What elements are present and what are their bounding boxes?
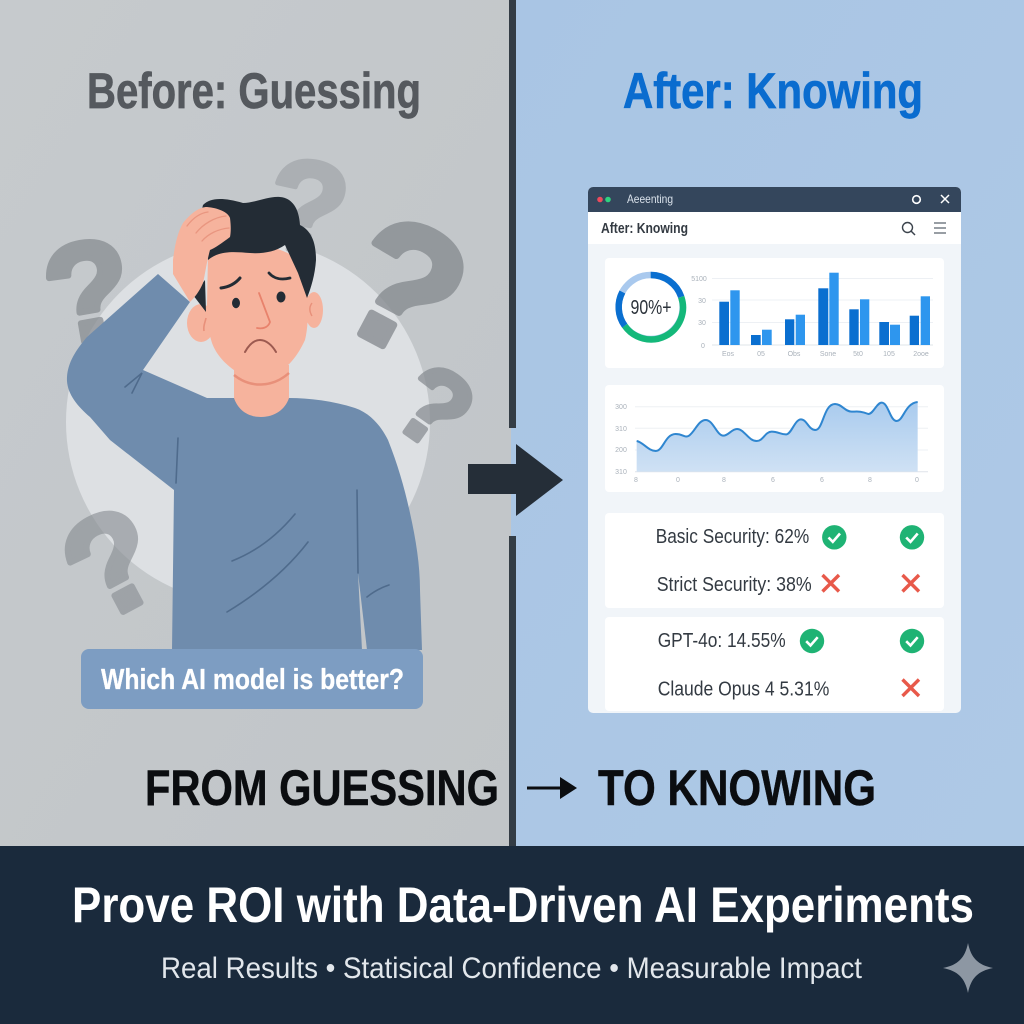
illustration: confused man [67,197,422,650]
heading: before: Before: Guessing [87,63,421,119]
card: line chart: 6 [771,477,775,484]
card: line chart: 8 [634,477,638,484]
card: line chart: 8 [722,477,726,484]
donut: 90%+ [619,275,683,339]
callout: question pill: Which AI model is better? [101,664,404,696]
dashboard: title bar: Aeeenting [627,192,673,206]
icon: cross [822,575,839,592]
donut: 90%+: 90%+ [630,297,672,319]
center divider [509,0,516,846]
tagline: from guessing to knowing: TO KNOWING [598,760,876,816]
tagline: from guessing to knowing: FROM GUESSING [145,760,499,816]
panel: dashboard window [588,187,961,713]
icon: cross [902,575,919,592]
icon: question marks: ? [256,128,359,286]
icon: sparkle [943,943,993,993]
dashboard: body [588,187,961,713]
man: shirt creases [125,373,389,612]
bar chart: 5100 [691,276,707,283]
icon: check [800,629,824,653]
card: model results: GPT-4o: 14.55% [658,630,786,652]
bar chart [691,273,933,358]
icon: question marks: ? [33,207,144,376]
backdrop circle [66,240,430,604]
tagline: from guessing to knowing [145,760,876,816]
card: donut and bar chart [605,258,944,368]
card: line chart: 310 [615,469,627,476]
man: shirt [67,274,422,650]
icon: question marks: ? [37,474,186,652]
panel: before background [0,0,512,846]
card: model results: Claude Opus 4 5.31% [658,679,829,701]
bar chart: 30 [698,298,706,305]
dashboard: title bar [588,187,961,212]
man: finger lines [187,212,229,241]
card: line chart: 0 [676,477,680,484]
man: hand [173,207,231,302]
callout: question pill [81,649,423,709]
card: line chart: 8 [868,477,872,484]
card: security results: Strict Security: 38% [657,574,812,596]
arrow: tagline [527,777,577,799]
man: hair [193,197,316,312]
card: security results: Basic Security: 62% [656,526,809,548]
dashboard: header [588,212,961,244]
icon: check [822,525,846,550]
panel: footer banner [0,846,1024,1024]
bar chart: 0 [701,343,705,350]
bar chart: 5t0 [853,351,863,358]
icon: question marks: ? [309,174,499,401]
bar chart: Sone [820,351,836,358]
card: line chart: 300 [615,404,627,411]
card: line chart: 0 [915,477,919,484]
card: model results [605,617,944,711]
icon: question marks [33,128,499,652]
arrow: before to after [468,444,563,516]
icon: question marks: ? [373,339,496,476]
card: security results [605,513,944,608]
bar chart: Eos [722,351,735,358]
icon: check [900,629,924,653]
panel: after background [511,0,1024,846]
man: face features [204,273,312,385]
bar chart: 30 [698,320,706,327]
card: line chart: 310 [615,426,627,433]
footer: subline: Real Results • Statisical Confidence • Measurable Impact [161,952,863,985]
bar chart: Obs [788,351,801,358]
card: line chart [605,385,944,492]
man: head [207,245,308,378]
dashboard: header: After: Knowing [601,220,688,237]
bar chart: 105 [883,351,895,358]
bar chart: 05 [757,351,765,358]
icon: check [900,525,924,550]
man: ears [187,292,323,342]
bar chart: 2ooe [913,351,929,358]
card: line chart: 200 [615,447,627,454]
heading: after: After: Knowing [623,63,923,119]
man: neck [234,365,289,417]
card: line chart: 6 [820,477,824,484]
icon: cross [902,680,919,696]
